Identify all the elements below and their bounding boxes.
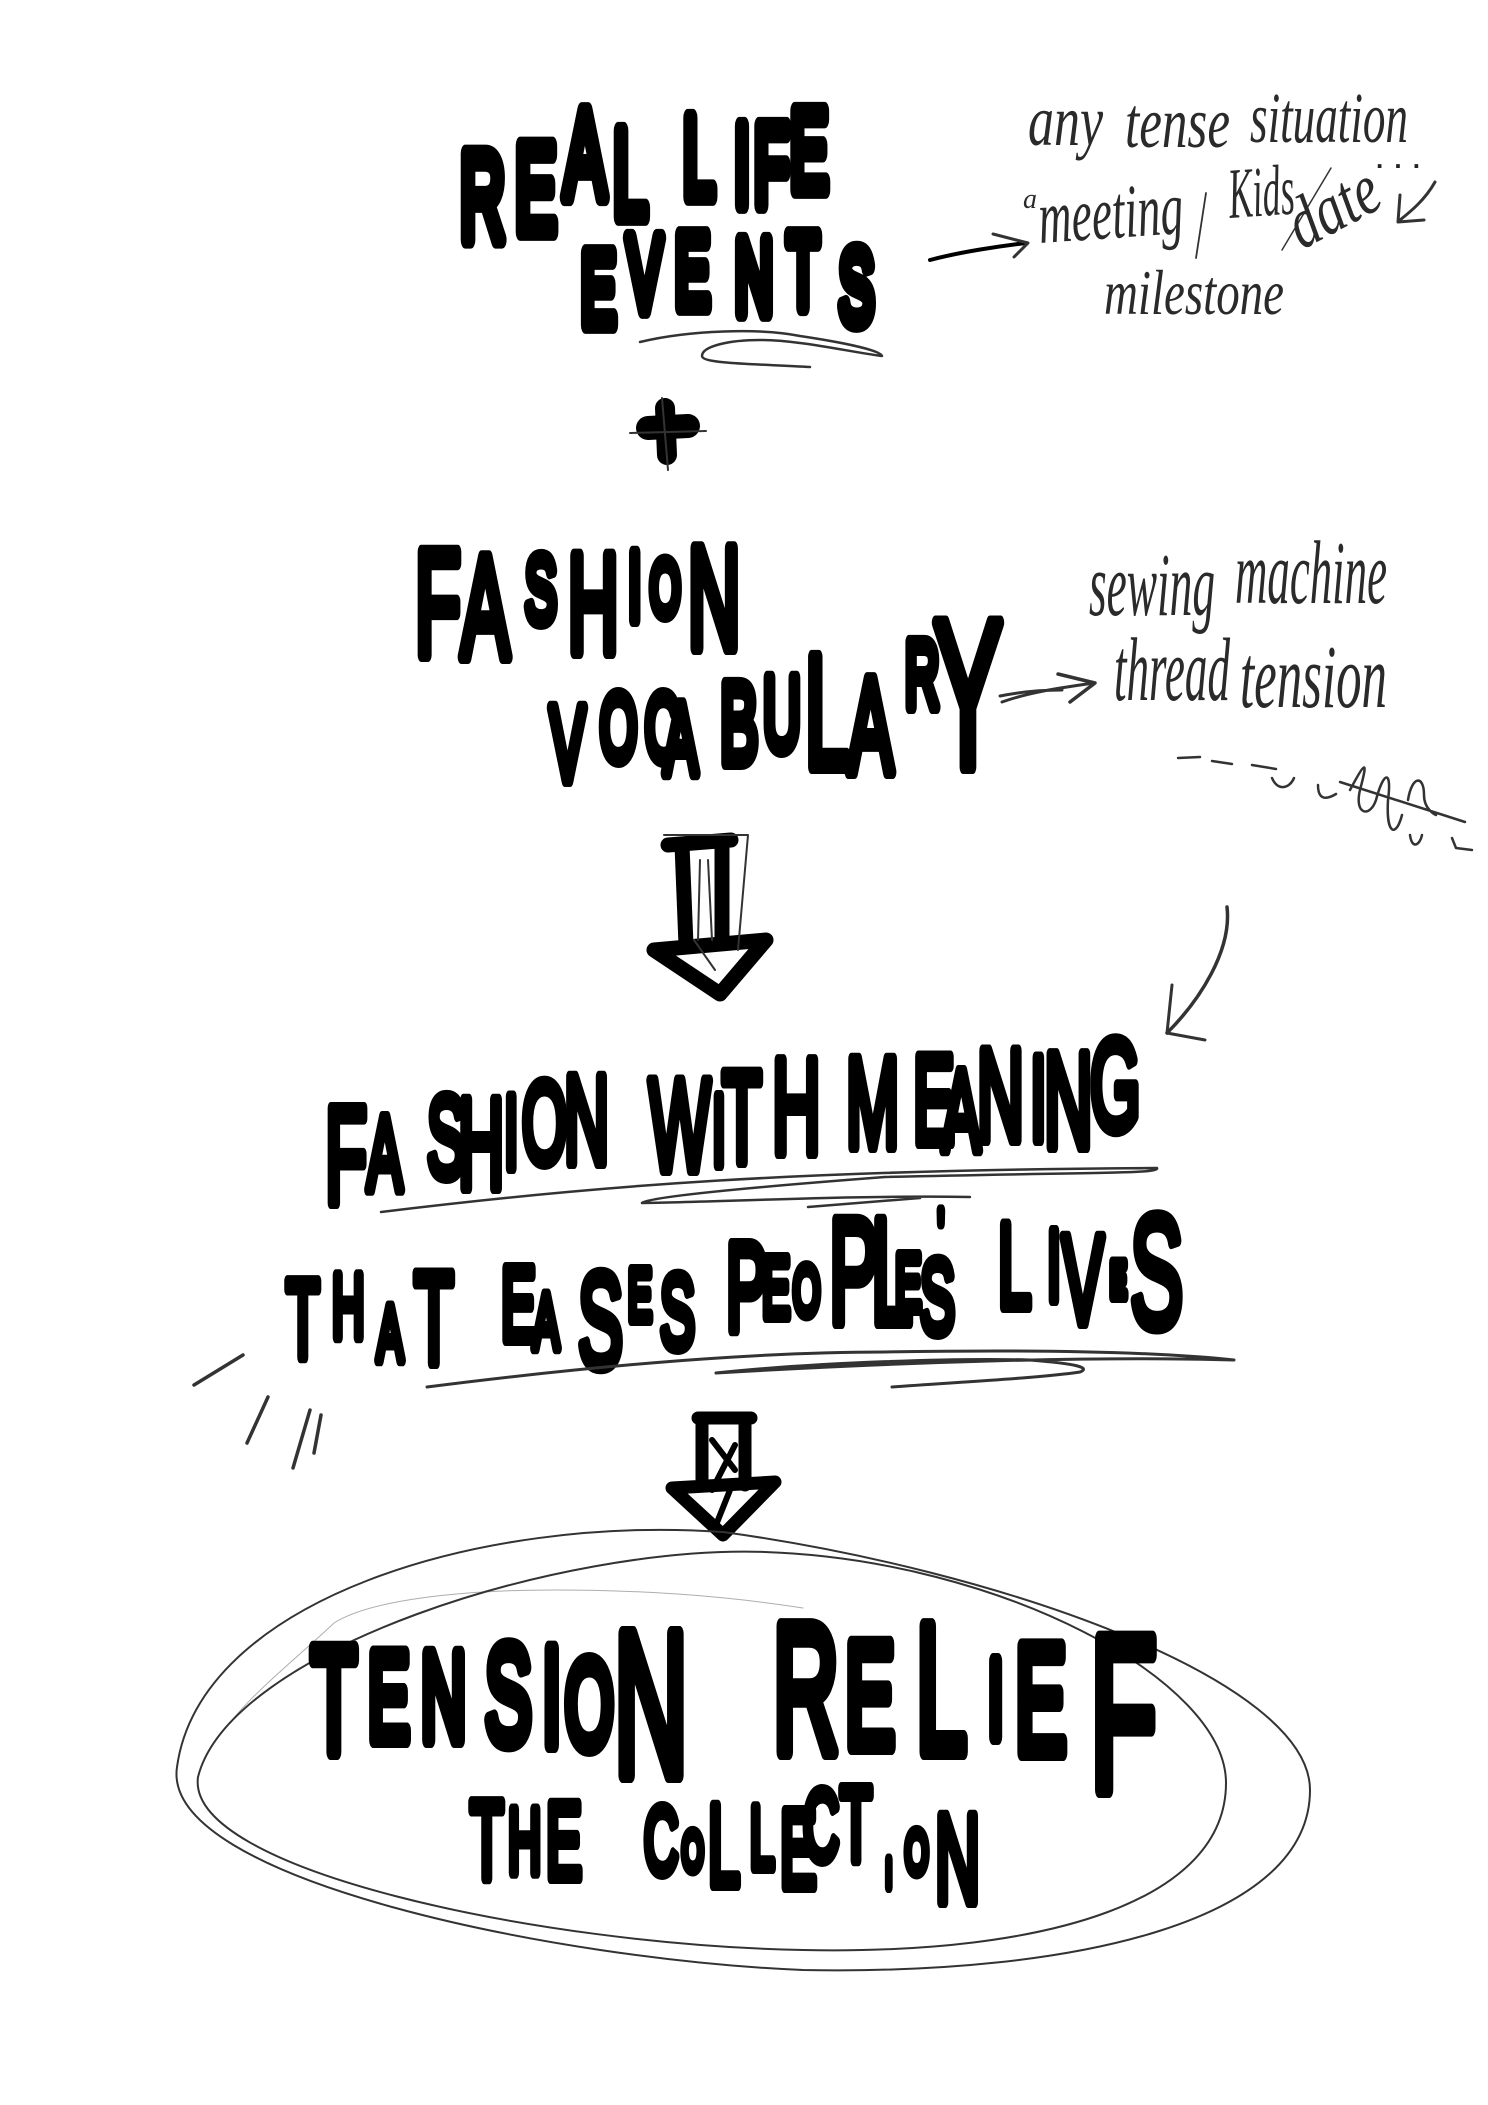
note: meeting kids date milestone: meeting — [1035, 166, 1186, 260]
heading: fashion with meaning: MEANING — [846, 1012, 1141, 1176]
note: any tense situation: any — [1028, 81, 1103, 161]
arrow: curved pointer to heading — [1167, 907, 1228, 1040]
heading: tension relief the collection: THE — [470, 1779, 582, 1902]
note: any tense situation: tense — [1125, 83, 1230, 163]
note: meeting kids date milestone: a — [1023, 184, 1037, 215]
heading: tension relief the collection: RELIEF — [773, 1586, 1157, 1837]
note: meeting kids date milestone: date — [1272, 149, 1393, 264]
note: sewing machine thread tension: sewing — [1089, 536, 1215, 635]
underline: that eases people's lives — [427, 1351, 1234, 1387]
heading: that eases people's lives: THAT — [286, 1245, 454, 1391]
arrow: vocabulary to notes — [1000, 674, 1095, 702]
underline: fashion with meaning — [381, 1168, 1157, 1212]
note: meeting kids date milestone — [1023, 144, 1435, 328]
note: meeting kids date milestone: milestone — [1104, 257, 1284, 328]
arrow: events to notes — [930, 234, 1028, 260]
heading: that eases people's lives: LIVES — [998, 1182, 1183, 1361]
heading: tension relief the collection: TENSION — [311, 1590, 688, 1819]
heading: fashion vocabulary: VOCABULARY — [550, 579, 1003, 813]
heading: real life events: REAL — [460, 84, 648, 267]
underline: real life events — [640, 331, 882, 367]
heading: that eases people's lives — [286, 1182, 1183, 1396]
heading: real life events: LIFE — [683, 88, 828, 230]
sketch ovals — [176, 1530, 1310, 1970]
heading: real life events — [460, 84, 874, 348]
heading: fashion with meaning: WITH — [649, 1030, 821, 1198]
heading: that eases people's lives: EASES — [501, 1244, 695, 1396]
plus sign — [630, 398, 706, 470]
note: any tense situation — [1028, 78, 1408, 163]
heading: tension relief the collection — [311, 1586, 1157, 1929]
heading: that eases people's lives: PEOPLE 'S — [726, 1189, 955, 1357]
squiggle: thread tension — [1178, 757, 1472, 850]
heading: tension relief the collection: COLLECT ION — [644, 1765, 980, 1929]
heading: fashion vocabulary: FASHION — [415, 518, 740, 689]
heading: fashion with meaning — [325, 1012, 1141, 1233]
note: meeting kids date milestone: Kids — [1225, 150, 1297, 234]
arrow: down to tension relief — [672, 1418, 775, 1535]
arrow: down to fashion with meaning — [654, 835, 766, 994]
tick marks — [194, 1355, 321, 1468]
heading: fashion with meaning: FASHION — [325, 1050, 609, 1233]
note: meeting kids date milestone: ... — [1376, 144, 1420, 174]
note: sewing machine thread tension — [1089, 524, 1387, 727]
note: sewing machine thread tension: thread — [1114, 621, 1230, 720]
heading: real life events: EVENTS — [581, 212, 874, 348]
heading: fashion vocabulary — [415, 518, 1003, 813]
